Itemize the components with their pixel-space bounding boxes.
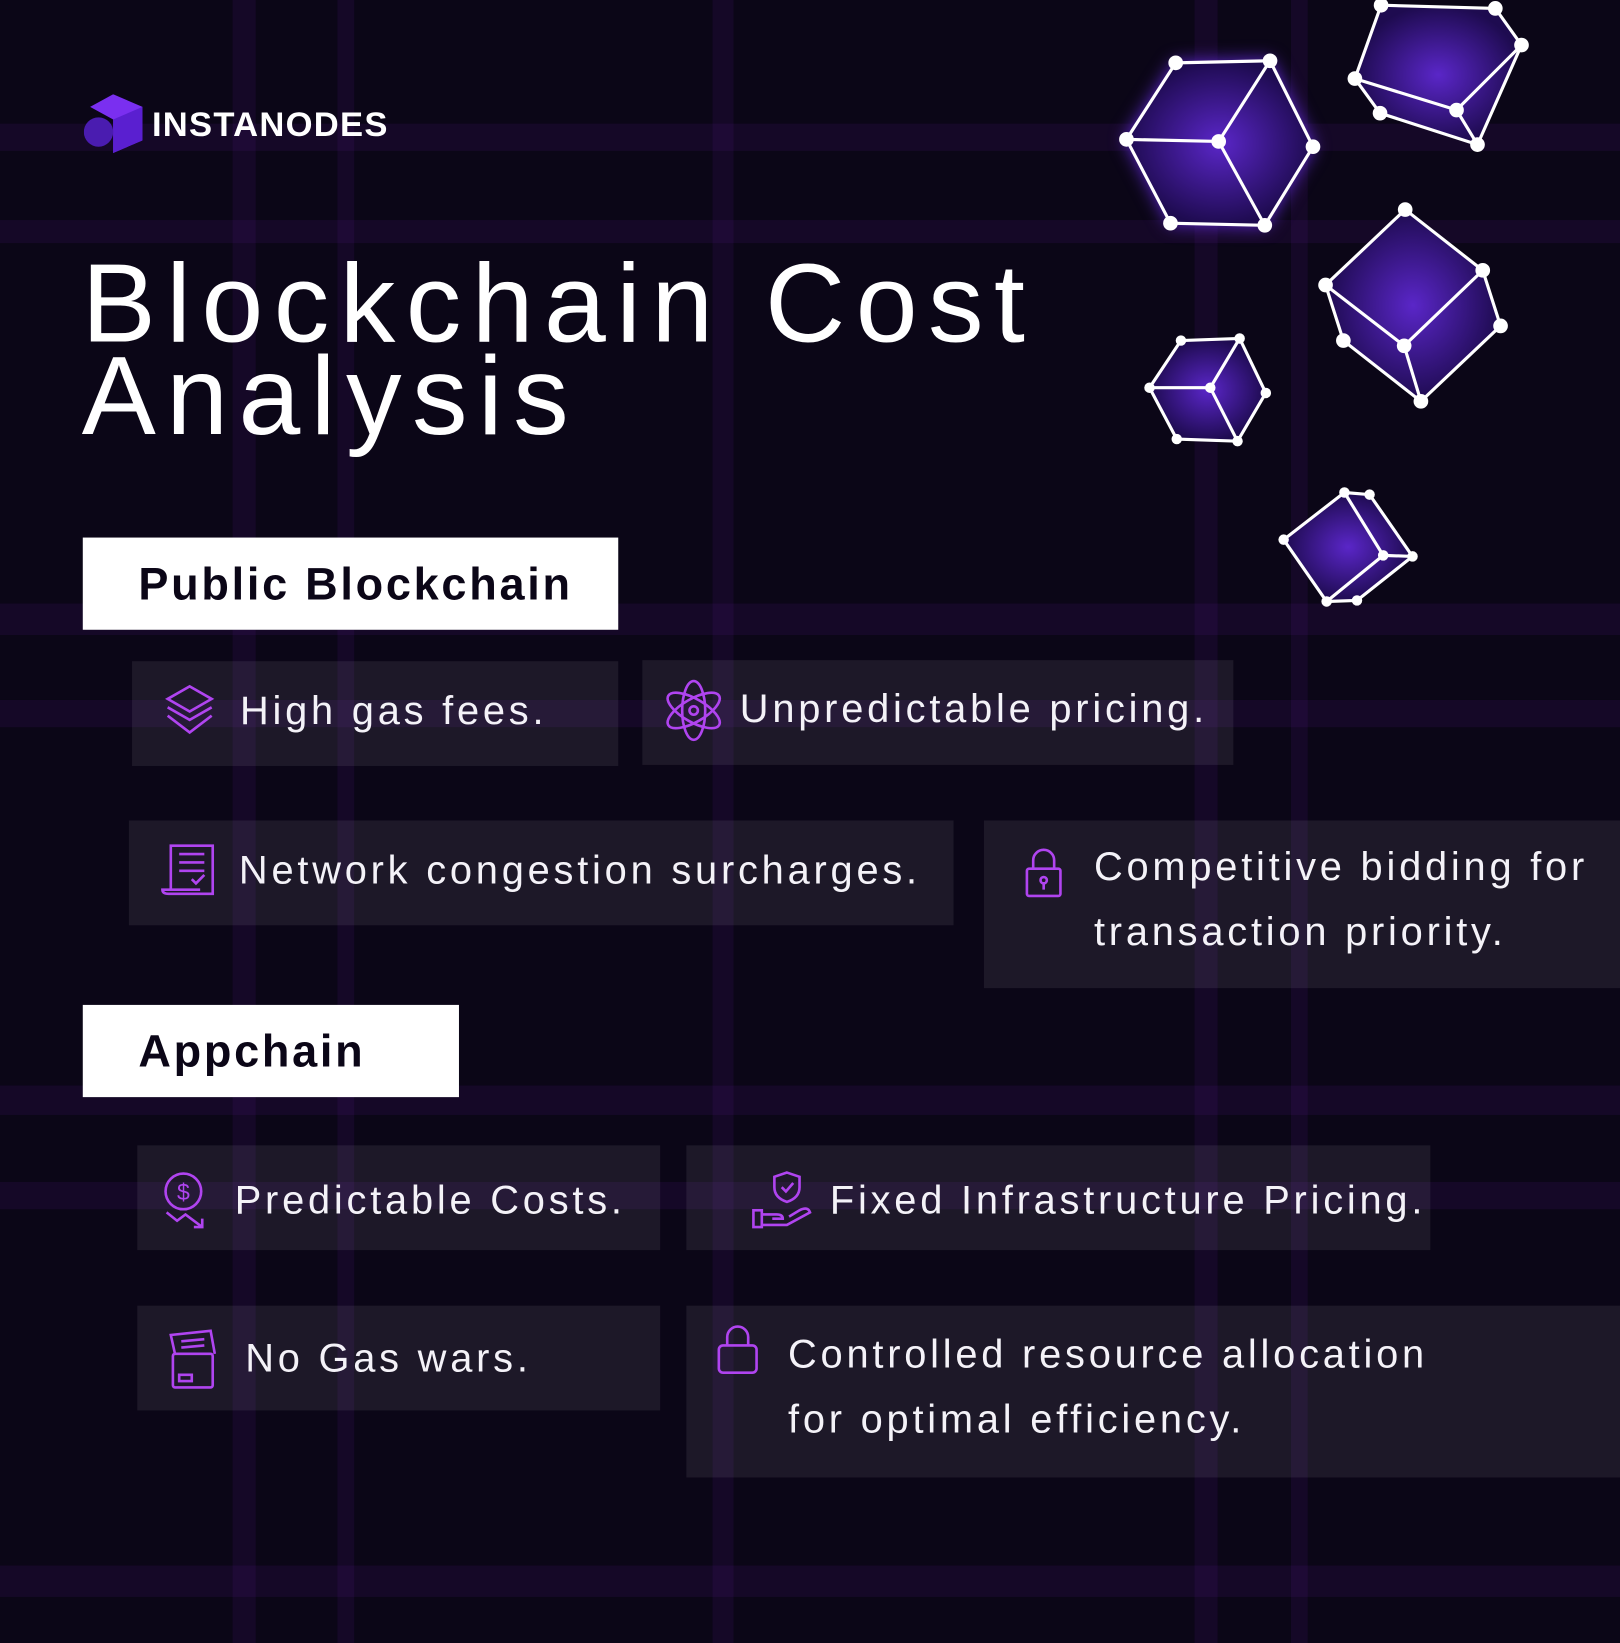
card: fixed infrastructure bbox=[686, 1145, 1430, 1250]
heading: Appchain: Appchain bbox=[138, 1027, 365, 1077]
card: no gas wars bbox=[137, 1306, 660, 1410]
card: competitive bidding: Competitive bidding for bbox=[1094, 846, 1588, 890]
card: network congestion: Network congestion surcharges. bbox=[239, 849, 921, 893]
logo bbox=[84, 94, 389, 153]
heading: Public Blockchain bbox=[83, 538, 618, 630]
card: fixed infrastructure: Fixed Infrastructure Pricing. bbox=[830, 1179, 1426, 1223]
card: controlled resource bbox=[686, 1306, 1620, 1477]
card: predictable costs bbox=[137, 1145, 660, 1250]
card: unpredictable pricing bbox=[642, 660, 1233, 765]
title: Blockchain Cost bbox=[82, 242, 1035, 366]
cubes bbox=[1115, 0, 1529, 607]
heading: Public Blockchain: Public Blockchain bbox=[138, 560, 573, 610]
card: competitive bidding: transaction priority. bbox=[1094, 911, 1507, 955]
card: controlled resource: Controlled resource allocation bbox=[788, 1333, 1428, 1377]
card: high gas fees bbox=[132, 661, 618, 766]
card: unpredictable pricing: Unpredictable pricing. bbox=[740, 687, 1208, 731]
logo: INSTANODES bbox=[152, 105, 389, 144]
card: controlled resource: for optimal efficiency. bbox=[788, 1398, 1245, 1442]
card: high gas fees: High gas fees. bbox=[240, 689, 547, 734]
title: Analysis bbox=[82, 334, 579, 458]
card: competitive bidding bbox=[984, 820, 1620, 988]
card: predictable costs: Predictable Costs. bbox=[235, 1179, 626, 1223]
card: network congestion bbox=[129, 820, 954, 925]
card: no gas wars: No Gas wars. bbox=[245, 1337, 532, 1381]
card: predictable costs: $ bbox=[177, 1179, 190, 1205]
title bbox=[82, 242, 1035, 458]
heading: Appchain bbox=[83, 1005, 459, 1097]
